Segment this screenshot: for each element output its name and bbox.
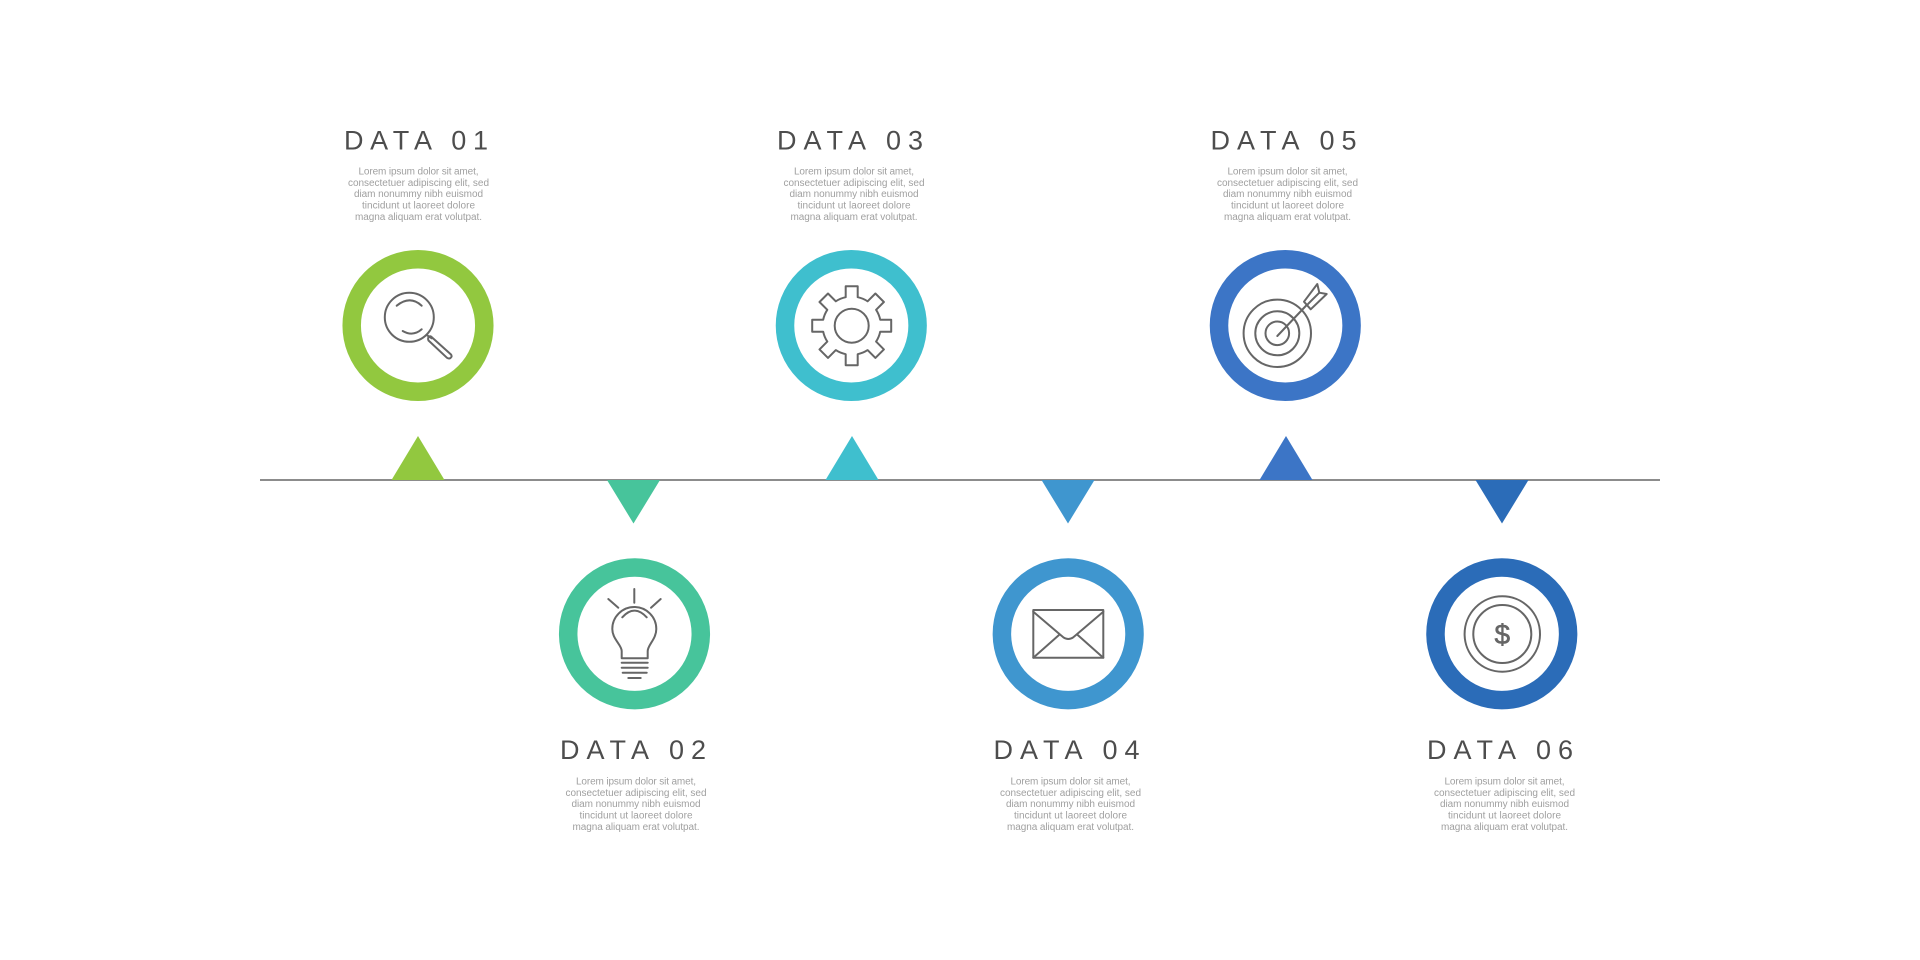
- text block: data 02: consectetuer adipiscing elit, sed: [566, 788, 706, 799]
- text block: data 01: tincidunt ut laoreet dolore: [362, 200, 475, 212]
- text block: data 02: [566, 776, 706, 833]
- ring: data 03: [785, 259, 918, 392]
- text block: data 01: magna aliquam erat volutpat.: [355, 212, 482, 223]
- icon: magnifying glass: [385, 293, 452, 358]
- heading: data 01: DATA 01: [344, 126, 488, 156]
- text block: data 01: [348, 166, 489, 223]
- panel: data 03: [777, 126, 924, 480]
- text block: data 04: [1000, 776, 1141, 833]
- panel: data 01: [344, 126, 489, 480]
- ring: data 04: [1002, 568, 1134, 700]
- icon: dollar coin: [1465, 596, 1540, 672]
- text block: data 04: magna aliquam erat volutpat.: [1007, 822, 1134, 833]
- text block: data 06: Lorem ipsum dolor sit amet,: [1444, 776, 1564, 788]
- icon: light bulb: [608, 589, 661, 678]
- ring: data 05: [1219, 259, 1352, 392]
- text block: data 02: tincidunt ut laoreet dolore: [580, 810, 693, 822]
- text block: data 04: consectetuer adipiscing elit, sed: [1000, 788, 1141, 799]
- panel: data 04: [994, 480, 1141, 833]
- text block: data 01: consectetuer adipiscing elit, sed: [348, 178, 489, 189]
- text block: data 02: Lorem ipsum dolor sit amet,: [576, 776, 696, 788]
- text block: data 06: diam nonummy nibh euismod: [1440, 799, 1569, 810]
- text block: data 05: tincidunt ut laoreet dolore: [1231, 200, 1344, 212]
- text block: data 05: [1217, 166, 1358, 223]
- heading: data 06: DATA 06: [1427, 735, 1573, 765]
- ring: data 02: [568, 568, 701, 700]
- timeline axis line: [260, 479, 1660, 481]
- heading: data 02: DATA 02: [560, 735, 706, 765]
- text block: data 06: [1434, 776, 1575, 833]
- text block: data 01: Lorem ipsum dolor sit amet,: [358, 166, 478, 178]
- text block: data 03: diam nonummy nibh euismod: [790, 189, 918, 200]
- triangle marker: data 01: [392, 436, 444, 480]
- panel: data 05: [1210, 126, 1358, 480]
- text block: data 06: tincidunt ut laoreet dolore: [1448, 810, 1561, 822]
- text block: data 05: diam nonummy nibh euismod: [1223, 189, 1352, 200]
- text block: data 04: Lorem ipsum dolor sit amet,: [1010, 776, 1130, 788]
- triangle marker: data 04: [1042, 480, 1094, 524]
- text block: data 03: [784, 166, 924, 223]
- text block: data 03: tincidunt ut laoreet dolore: [798, 200, 911, 212]
- text block: data 03: Lorem ipsum dolor sit amet,: [794, 166, 914, 178]
- text block: data 03: consectetuer adipiscing elit, sed: [784, 178, 924, 189]
- text block: data 05: magna aliquam erat volutpat.: [1224, 212, 1351, 223]
- triangle marker: data 03: [826, 436, 878, 480]
- ring: data 01: [352, 259, 484, 392]
- text block: data 02: diam nonummy nibh euismod: [572, 799, 700, 810]
- text block: data 02: magna aliquam erat volutpat.: [572, 822, 700, 833]
- text block: data 05: consectetuer adipiscing elit, sed: [1217, 178, 1358, 189]
- icon: dollar coin: $: [1495, 619, 1511, 650]
- icon: target with arrow: [1244, 284, 1327, 367]
- text block: data 06: consectetuer adipiscing elit, sed: [1434, 788, 1575, 799]
- heading: data 05: DATA 05: [1210, 126, 1356, 156]
- text block: data 01: diam nonummy nibh euismod: [354, 189, 483, 200]
- triangle marker: data 05: [1260, 436, 1312, 480]
- heading: data 04: DATA 04: [994, 735, 1140, 765]
- text block: data 06: magna aliquam erat volutpat.: [1441, 822, 1568, 833]
- text block: data 04: tincidunt ut laoreet dolore: [1014, 810, 1127, 822]
- text block: data 04: diam nonummy nibh euismod: [1006, 799, 1135, 810]
- heading: data 03: DATA 03: [777, 126, 923, 156]
- panel: data 02: [560, 480, 706, 833]
- triangle marker: data 06: [1476, 480, 1528, 524]
- icon: envelope: [1033, 610, 1103, 658]
- panel: data 06: [1427, 480, 1575, 833]
- triangle marker: data 02: [607, 480, 660, 524]
- text block: data 03: magna aliquam erat volutpat.: [790, 212, 918, 223]
- ring: data 06: [1436, 568, 1568, 700]
- icon: gear: [812, 286, 891, 365]
- text block: data 05: Lorem ipsum dolor sit amet,: [1228, 166, 1348, 178]
